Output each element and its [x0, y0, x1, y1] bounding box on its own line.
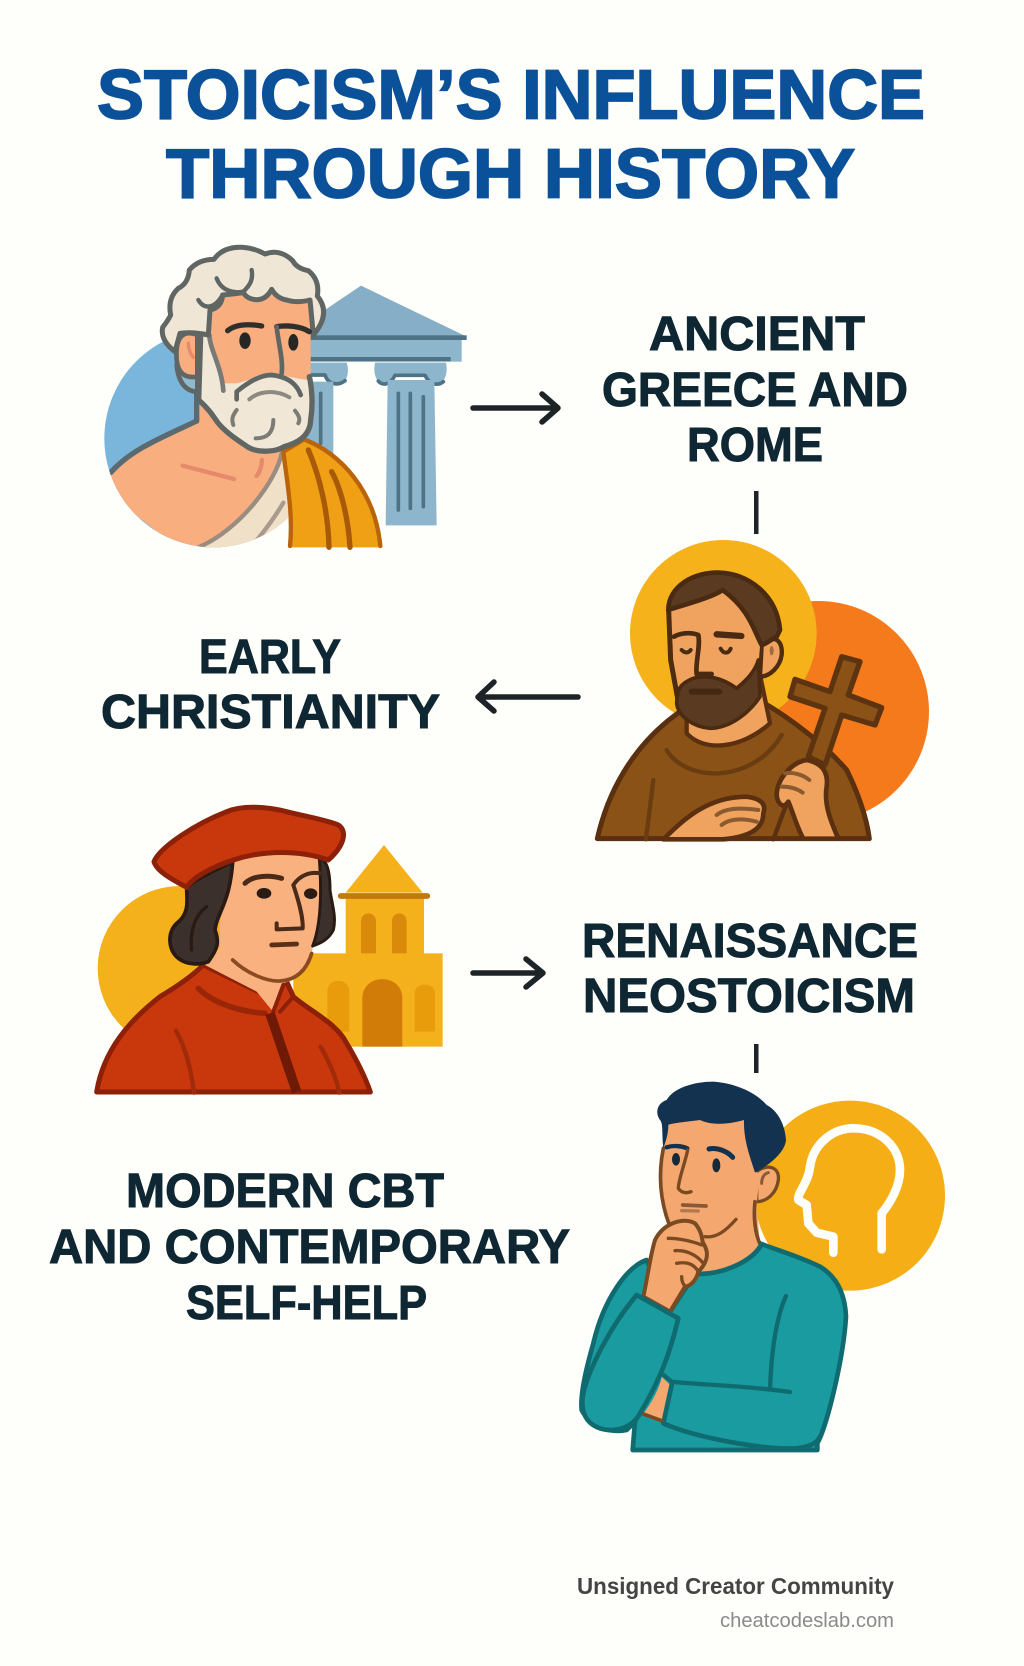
illustration: early Christian saint with cross: [597, 540, 929, 839]
title: [97, 56, 925, 212]
connector: neostoicism to modern: [754, 1044, 758, 1073]
label: modern CBT and contemporary self-help: MODERN CBT: [126, 1165, 444, 1218]
orange toga: [283, 439, 382, 547]
label: Renaissance neostoicism: NEOSTOICISM: [583, 970, 915, 1023]
label: modern CBT and contemporary self-help: SELF-HELP: [186, 1277, 427, 1330]
ear: [176, 333, 197, 392]
label: ancient Greece and Rome: GREECE AND: [602, 364, 908, 417]
icon: head outline: [798, 1128, 900, 1253]
facial features: [674, 633, 741, 674]
hair: [668, 573, 780, 645]
blue circle backdrop: [104, 329, 322, 547]
halo: [630, 540, 817, 727]
arrow: saint to early Christianity: [478, 682, 578, 711]
ear: [757, 1167, 778, 1202]
forearm hand under elbow: [643, 1377, 670, 1421]
collar and folds: [176, 985, 339, 1093]
hair: [657, 1082, 786, 1173]
facial features: [228, 325, 309, 373]
beard: [677, 660, 760, 728]
footer credit: [577, 1573, 894, 1632]
facial features: [233, 873, 320, 981]
facial features: [667, 1146, 768, 1237]
title: THROUGH HISTORY: [166, 134, 855, 212]
face and neck: [205, 847, 320, 1010]
illustration: ancient philosopher and temple: [100, 247, 467, 550]
cross: [790, 657, 882, 765]
face: [205, 290, 311, 387]
orange circle backdrop: [708, 601, 929, 822]
face outline: [661, 1148, 760, 1244]
skin creases: [183, 460, 262, 479]
face: [669, 588, 760, 707]
label: Renaissance neostoicism: RENAISSANCE: [582, 915, 918, 968]
label: modern CBT and contemporary self-help: AND CONTEMPORARY: [49, 1221, 570, 1274]
red beret: [154, 807, 344, 887]
red robe: [97, 965, 370, 1092]
raised sleeve: [582, 1295, 678, 1430]
footer credit: cheatcodeslab.com: [720, 1610, 894, 1632]
robe: [597, 702, 869, 839]
building: [293, 845, 443, 1047]
footer credit: Unsigned Creator Community: [577, 1573, 894, 1599]
ear: [760, 639, 782, 677]
robe folds: [646, 735, 782, 839]
connector: Rome to early Christianity: [754, 491, 758, 534]
yellow circle backdrop: [755, 1101, 945, 1291]
face and neck: [661, 1107, 760, 1273]
label: ancient Greece and Rome: ANCIENT: [649, 308, 865, 361]
hair: [170, 858, 334, 964]
neckline: [700, 1244, 762, 1274]
title: STOICISM’S INFLUENCE: [97, 56, 925, 134]
label: early Christianity: EARLY: [199, 631, 341, 684]
label: ancient Greece and Rome: ROME: [687, 419, 823, 472]
hair: [162, 247, 324, 352]
illustration: modern man thinking: [581, 1082, 945, 1450]
label: Renaissance neostoicism: [582, 915, 918, 1023]
arrow: philosopher to ancient Greece and Rome: [473, 394, 558, 422]
folded arm: [643, 1296, 820, 1448]
right hand: [773, 760, 838, 839]
label: modern CBT and contemporary self-help: [49, 1165, 570, 1330]
teal shirt: [581, 1244, 846, 1450]
neck: [687, 667, 770, 745]
label: early Christianity: CHRISTIANITY: [101, 686, 440, 739]
temple: [310, 286, 467, 525]
label: early Christianity: [101, 631, 440, 739]
beard: [199, 335, 312, 451]
hand on chin: [643, 1221, 707, 1312]
torso: [109, 394, 288, 548]
label: ancient Greece and Rome: [602, 308, 908, 472]
left hand: [663, 797, 764, 839]
yellow circle backdrop: [98, 886, 262, 1051]
arrow: thinker to Renaissance neostoicism: [473, 959, 543, 987]
illustration: Renaissance thinker and building: [97, 807, 443, 1093]
